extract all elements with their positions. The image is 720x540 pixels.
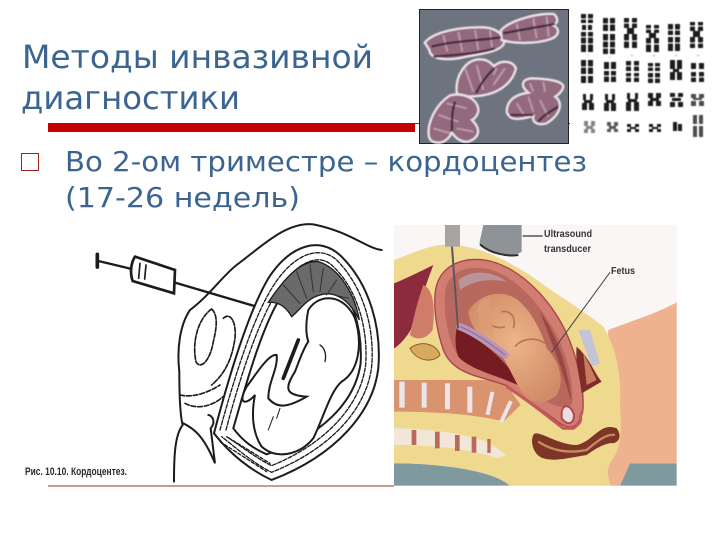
bullet text lines — [65, 145, 587, 214]
brick pattern — [220, 438, 270, 472]
amniotic highlight — [458, 273, 507, 290]
labels — [544, 228, 635, 277]
row 2 — [581, 60, 593, 83]
bullet text lines: (17-26 недель) — [65, 181, 300, 214]
fetus — [242, 298, 359, 454]
chromosome lower left — [429, 95, 478, 143]
syringe — [97, 254, 292, 317]
uterus wall — [214, 245, 379, 480]
chromosome top right — [501, 14, 558, 43]
chromosome lower right — [507, 78, 563, 124]
table and background — [394, 463, 677, 486]
bottom rule — [48, 485, 394, 487]
row 4 — [584, 121, 595, 133]
abdomen contour — [174, 224, 382, 482]
rectum — [532, 427, 620, 460]
uterus wall — [435, 259, 583, 427]
umbilical cord — [460, 327, 505, 355]
karyotype chart — [580, 14, 705, 137]
left abdominal organs — [394, 265, 433, 348]
lower spine — [394, 380, 521, 422]
chromosome center — [456, 59, 516, 97]
ultrasound transducer — [479, 225, 522, 255]
caption: Рис. 10.10. Кордоцентез. — [25, 466, 127, 478]
row 1 — [581, 14, 593, 52]
label ticks — [587, 55, 699, 58]
labels: Ultrasound — [544, 228, 592, 240]
maternal body fat layer — [394, 245, 621, 486]
row 3 — [582, 94, 594, 110]
illustration: cordocentesis line drawing — [25, 224, 382, 482]
needle — [445, 225, 460, 247]
placenta — [268, 262, 359, 320]
bladder — [578, 330, 600, 367]
title: Методы инвазивной — [22, 38, 373, 76]
labels: transducer — [544, 243, 591, 255]
bullet marker — [22, 154, 38, 170]
chromosome bands — [580, 19, 705, 78]
labels: Fetus — [611, 265, 635, 277]
bullet text lines: Во 2-ом триместре – кордоцентез — [65, 145, 587, 178]
chromosome top long — [425, 27, 504, 59]
bladder and organs dashed — [195, 309, 216, 365]
red title rule — [48, 123, 570, 132]
title — [21, 38, 373, 117]
cervix and lower structures — [562, 406, 574, 423]
maternal thigh — [603, 302, 677, 486]
photo: chromosomes micrograph — [419, 9, 569, 144]
uterus cavity — [445, 268, 572, 407]
bullet text — [22, 145, 587, 214]
dark cavity shadow — [456, 328, 530, 391]
title: диагностики — [21, 79, 240, 117]
fetus — [468, 294, 561, 402]
fetus leader line — [552, 272, 610, 352]
illustration: ultrasound-guided cordocentesis — [394, 225, 677, 486]
